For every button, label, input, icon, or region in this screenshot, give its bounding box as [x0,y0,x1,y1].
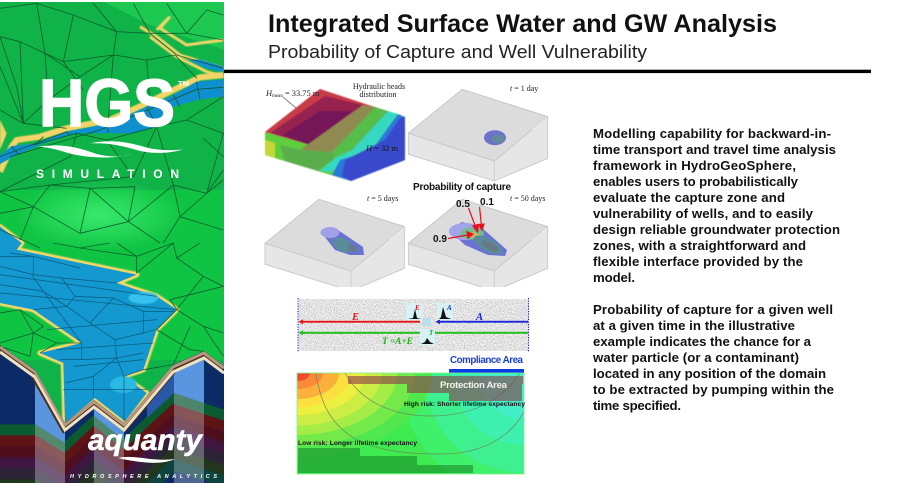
chart: capture at t = 1 day [408,84,548,181]
land mesh lines [0,3,223,243]
logo: HGS [42,78,188,128]
arrow: A [436,319,528,324]
text block: modelling capability [593,126,840,285]
logo: HGS: HGS [39,66,175,141]
text block: modelling capability: time transport and travel time analysis [593,142,836,157]
logo: aquanty: aquanty [88,424,203,457]
label: H mean: = 33.75 m [283,89,320,98]
chart: capture at t = 1 day: t = 1 day [510,84,538,93]
chart: capture at t = 50 days: t = 50 days [510,194,545,203]
text block: probability of capture explanation: example indicates the chance for a [593,334,812,349]
label: T=A+E: T =A+E [382,337,413,347]
inset: E distribution: E [414,304,420,312]
panel: HGS sidebar [0,0,226,486]
water mesh lines [0,253,175,421]
inset: T distribution [420,329,435,345]
bar: compliance area [449,369,524,373]
text block: probability of capture explanation: water particle (or a contaminant) [592,350,799,365]
label: hydraulic heads: Hydraulic heads [353,82,405,91]
label: H mean: mean [272,94,283,99]
chart: capture at t = 5 days [265,194,404,291]
logo: waves [38,141,183,158]
callout: probability contours [433,197,494,245]
inset: E distribution [406,303,422,320]
callout: probability contours: 0.1 [480,197,494,208]
logo: aquanty [88,430,204,463]
logo: simulation: SIMULATION [36,167,179,181]
text block: modelling capability: evaluate the capture zone and [593,190,785,205]
chart: capture at t = 50 days [408,194,548,291]
text block: probability of capture explanation [592,302,834,413]
text block: modelling capability: vulnerability of wells, and to easily [593,206,814,221]
diagram: travel time along flow path [298,298,529,352]
label: A: A [475,312,483,323]
subtitle: Probability of Capture and Well Vulnerability [268,42,647,62]
title: Integrated Surface Water and GW Analysis [268,10,777,38]
inset: T distribution: T [429,329,434,337]
text block: modelling capability: Modelling capability for backward-in- [593,126,831,141]
text block: probability of capture explanation: Probability of capture for a given well [593,302,833,317]
label: H mean: H [265,89,273,98]
text block: probability of capture explanation: time specified. [593,398,681,413]
logo: tagline: HYDROSPHERE ANALYTICS [70,474,217,480]
zone: low risk [298,448,473,473]
text block: modelling capability: enables users to probabilistically [593,174,799,189]
icon: well [423,318,431,326]
text block: modelling capability: design reliable groundwater protection [593,222,840,237]
label: hydraulic heads: distribution [360,90,396,99]
arrow: T [298,330,528,335]
text block: probability of capture explanation: located in any position of the domain [593,366,826,381]
arrow: E [298,319,420,324]
callout: probability contours: 0.9 [433,234,447,245]
inset: A distribution [437,303,453,320]
logo: HGS: TM [178,79,189,88]
zone: protection area [348,376,523,401]
text block: probability of capture explanation: at a given time in the illustrative [593,318,795,333]
chart: capture at t = 5 days: t = 5 days [367,194,398,203]
chart: risk heatmap [296,372,525,474]
label: low risk: Low risk: Longer lifetime expectancy [298,440,417,447]
callout: probability contours: 0.5 [456,199,470,210]
label: H mean [265,89,320,108]
text block: modelling capability: flexible interface provided by the [593,254,803,269]
chart: hydraulic heads distribution [265,89,405,181]
text block: modelling capability: framework in HydroGeoSphere, [593,158,796,173]
strata block [0,340,226,486]
label: protection area: Protection Area [440,380,508,391]
label: E: E [351,312,359,323]
inset: A distribution: A [446,304,452,312]
label: H 32 m: H = 32 m [365,144,398,153]
label: hydraulic heads [353,82,405,99]
label: compliance area: Compliance Area [450,355,524,366]
text block: modelling capability: model. [593,270,635,285]
heading: probability of capture: Probability of capture [413,182,511,193]
text block: probability of capture explanation: to be extracted by pumping within the [593,382,834,397]
label: high risk: High risk: Shorter lifetime expectancy [404,401,525,408]
text block: modelling capability: zones, with a straightforward and [593,238,806,253]
